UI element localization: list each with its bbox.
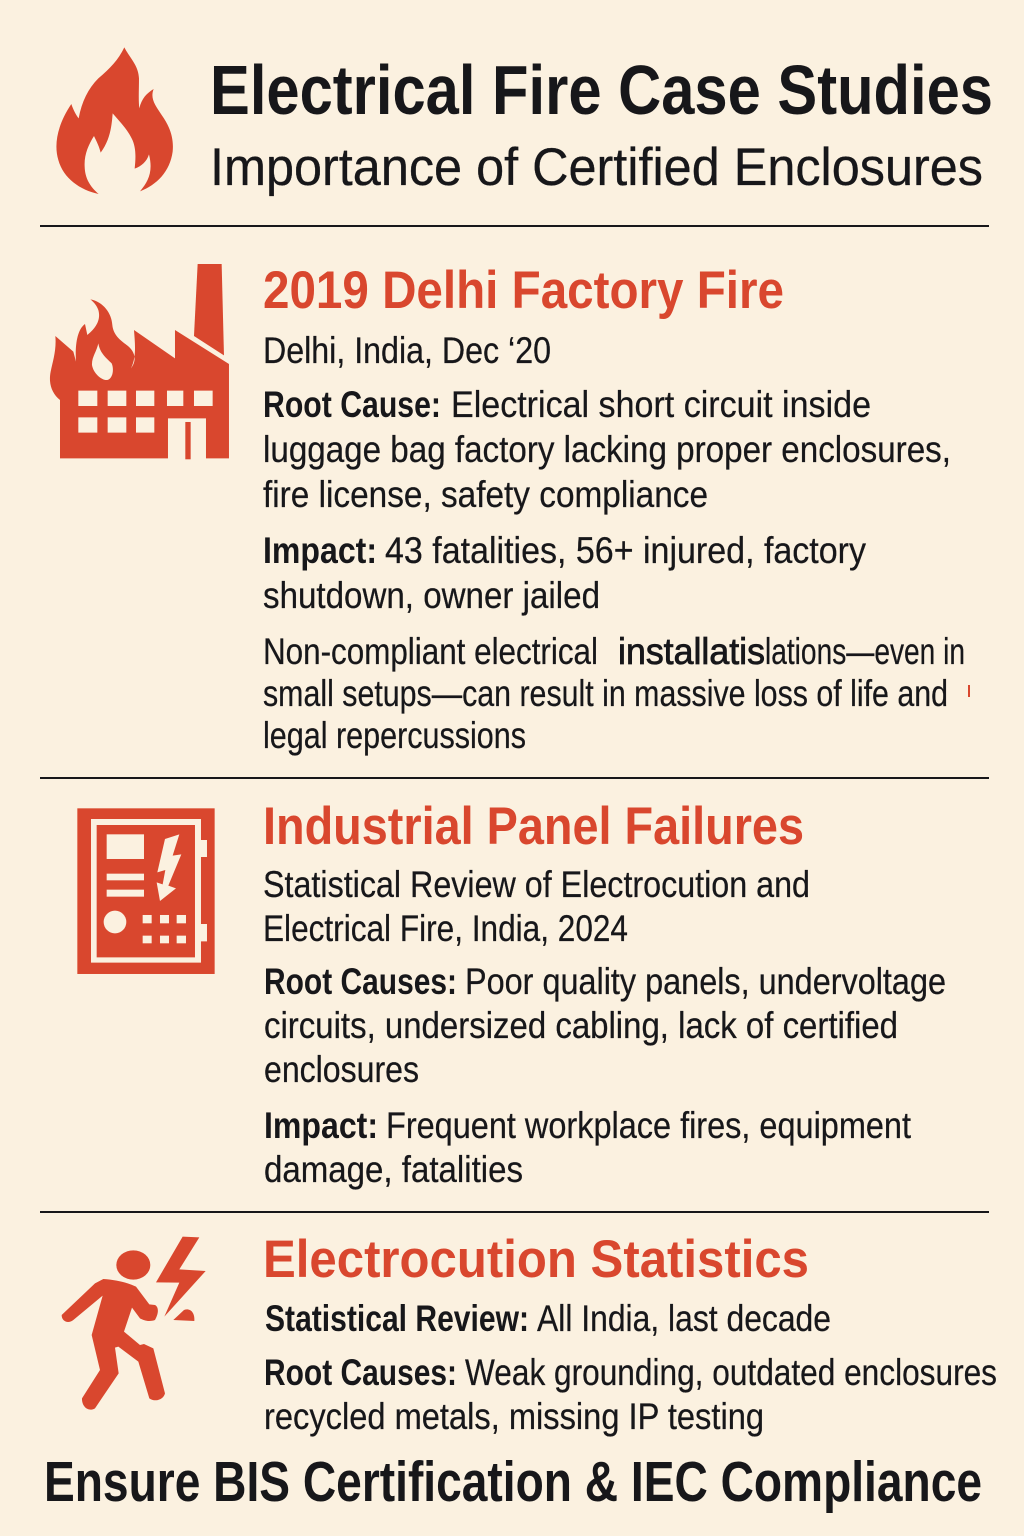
panel: Industrial Panel Failures: [77, 797, 946, 1190]
root causes: recycled metals, missing IP testing: [264, 1396, 764, 1437]
root cause: [263, 384, 951, 515]
root causes: [264, 961, 946, 1090]
source: Statistical Review of Electrocution and: [263, 864, 810, 905]
header: [56, 47, 993, 197]
root causes: Root Causes:: [264, 1352, 457, 1393]
impact: [263, 530, 866, 616]
panel: Electrocution Statistics: [62, 1230, 997, 1437]
icon: person electrocuted: [62, 1237, 206, 1410]
root cause: luggage bag factory lacking proper enclosures,: [263, 429, 951, 470]
root cause: Root Cause:: [263, 384, 441, 425]
lesson: lations—even in: [765, 631, 965, 672]
root cause: fire license, safety compliance: [263, 474, 708, 515]
lesson: installatis: [618, 631, 765, 672]
root causes: enclosures: [264, 1049, 419, 1090]
impact: Impact:: [264, 1105, 378, 1146]
impact: [264, 1105, 912, 1190]
panel: 2019 Delhi Factory Fire: [50, 261, 970, 756]
heading: 2019 Delhi Factory Fire: [263, 261, 784, 320]
impact: Impact:: [263, 530, 377, 571]
source: Electrical Fire, India, 2024: [263, 908, 628, 949]
impact: shutdown, owner jailed: [263, 575, 600, 616]
lesson: legal repercussions: [263, 715, 526, 756]
root causes: Root Causes:: [264, 961, 457, 1002]
icon: burning factory: [50, 264, 229, 459]
source: [263, 864, 810, 949]
root cause: Electrical short circuit inside: [451, 384, 871, 425]
statistical review: All India, last decade: [537, 1298, 831, 1339]
root causes: Poor quality panels, undervoltage: [465, 961, 946, 1002]
heading: Electrocution Statistics: [263, 1230, 809, 1289]
heading: Industrial Panel Failures: [263, 797, 804, 856]
location and date: Delhi, India, Dec ‘20: [263, 330, 551, 371]
impact: damage, fatalities: [264, 1149, 523, 1190]
root causes: [264, 1352, 997, 1437]
icon: electrical panel: [77, 808, 215, 974]
icon: flame: [56, 47, 173, 194]
impact: 43 fatalities, 56+ injured, factory: [385, 530, 866, 571]
lesson: [263, 631, 970, 756]
lesson: Non-compliant electrical: [263, 631, 598, 672]
subtitle: Importance of Certified Enclosures: [210, 138, 983, 197]
root causes: circuits, undersized cabling, lack of certified: [264, 1005, 898, 1046]
statistical review: Statistical Review:: [265, 1298, 529, 1339]
statistical review: [265, 1298, 831, 1339]
impact: Frequent workplace fires, equipment: [386, 1105, 912, 1146]
